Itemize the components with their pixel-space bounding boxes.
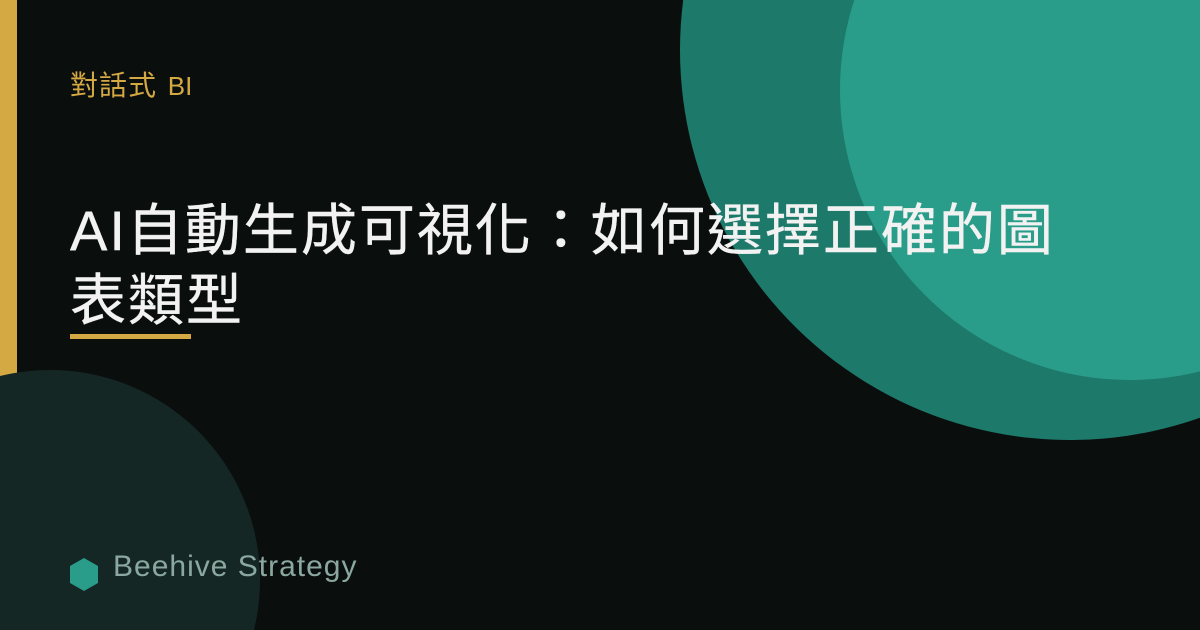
brand (70, 550, 357, 591)
brand name: Beehive Strategy (113, 550, 357, 583)
title: AI自動生成可視化：如何選擇正確的圖 (70, 199, 1055, 262)
icon: hexagon logo (70, 558, 98, 591)
title (70, 199, 1055, 332)
accent bar: left gold stripe (0, 0, 17, 400)
title: 表類型 (70, 269, 244, 332)
decorative circle: bottom left dark (0, 370, 260, 630)
category label: 對話式 BI (70, 70, 192, 101)
decorative circle: light teal (840, 0, 1200, 380)
decorative circle: large dark teal (680, 0, 1200, 440)
title underline (70, 334, 191, 339)
